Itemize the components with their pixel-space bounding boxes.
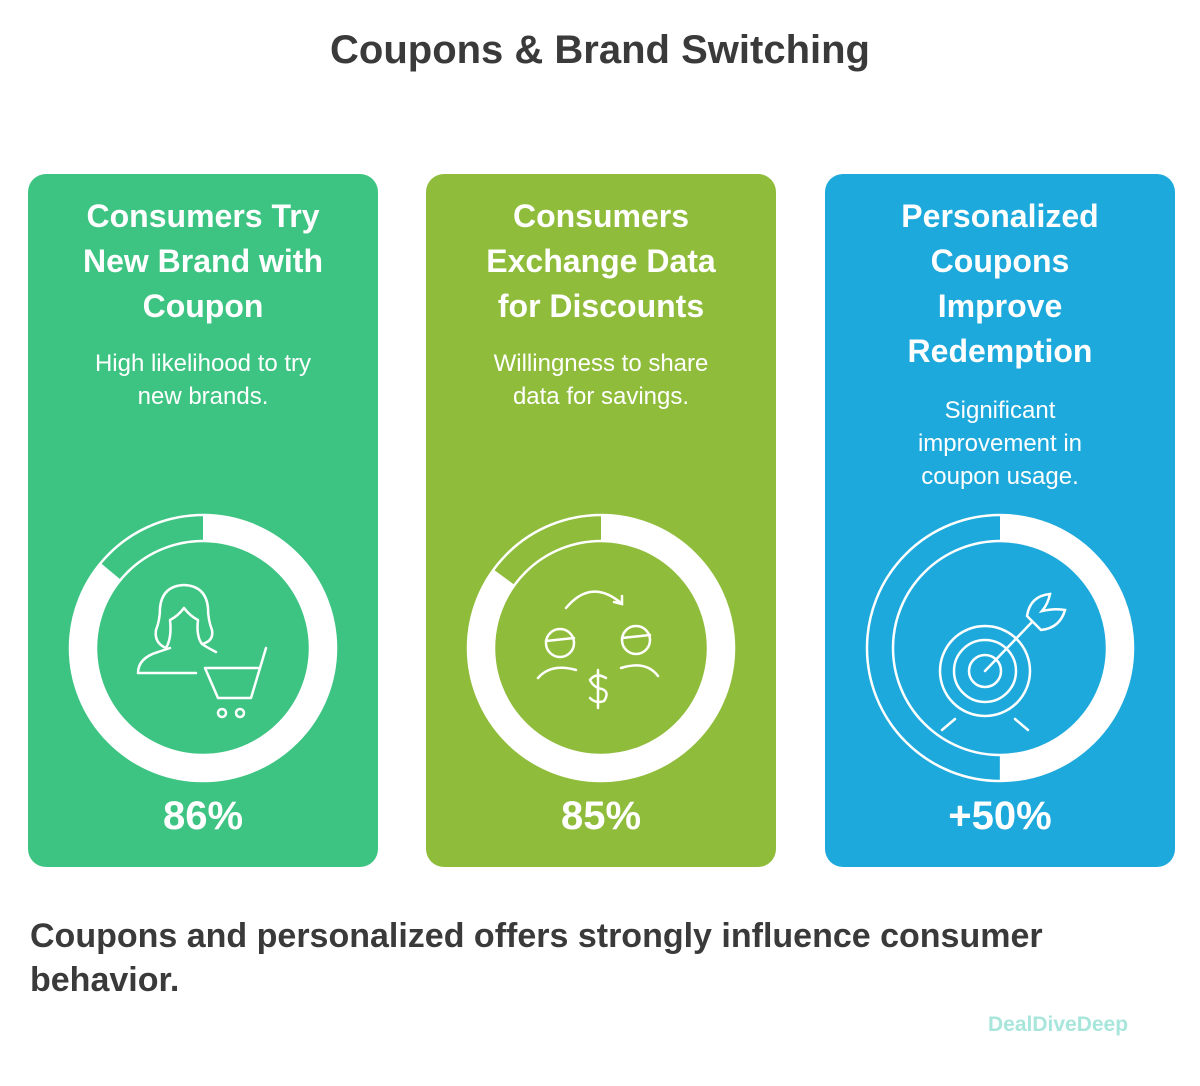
heading xyxy=(83,198,323,324)
icon: person with cart xyxy=(138,585,266,717)
donut chart +50% xyxy=(866,514,1134,782)
heading: Exchange Data xyxy=(486,243,716,279)
footer text: Coupons and personalized offers strongly influence consumer behavior. xyxy=(30,917,1043,999)
panel: personalized coupons xyxy=(825,174,1175,867)
panel: exchange data xyxy=(426,174,776,867)
description: High likelihood to try new brands. xyxy=(95,350,311,410)
icon: exchange people dollar xyxy=(538,592,658,708)
heading: Personalized xyxy=(901,198,1099,234)
stat: 85% xyxy=(561,794,641,838)
heading: New Brand with xyxy=(83,243,323,279)
brand mark: DealDiveDeep xyxy=(988,1013,1128,1036)
heading: Improve xyxy=(938,288,1062,324)
heading: for Discounts xyxy=(498,288,704,324)
description: Willingness to share data for savings. xyxy=(494,350,708,410)
heading: Consumers Try xyxy=(87,198,319,234)
heading xyxy=(486,198,716,324)
donut chart 86% xyxy=(68,514,338,782)
heading: Consumers xyxy=(513,198,689,234)
icon: target with arrow xyxy=(940,594,1065,730)
stat: +50% xyxy=(948,794,1052,838)
stat: 86% xyxy=(163,794,243,838)
heading: Redemption xyxy=(908,333,1092,369)
title: Coupons & Brand Switching xyxy=(330,28,870,72)
donut chart 85% xyxy=(466,514,736,782)
heading: Coupons xyxy=(931,243,1069,279)
description: Significant improvement in coupon usage. xyxy=(918,397,1082,490)
heading: Coupon xyxy=(143,288,263,324)
heading xyxy=(901,198,1099,369)
panel: try new brand xyxy=(28,174,378,867)
